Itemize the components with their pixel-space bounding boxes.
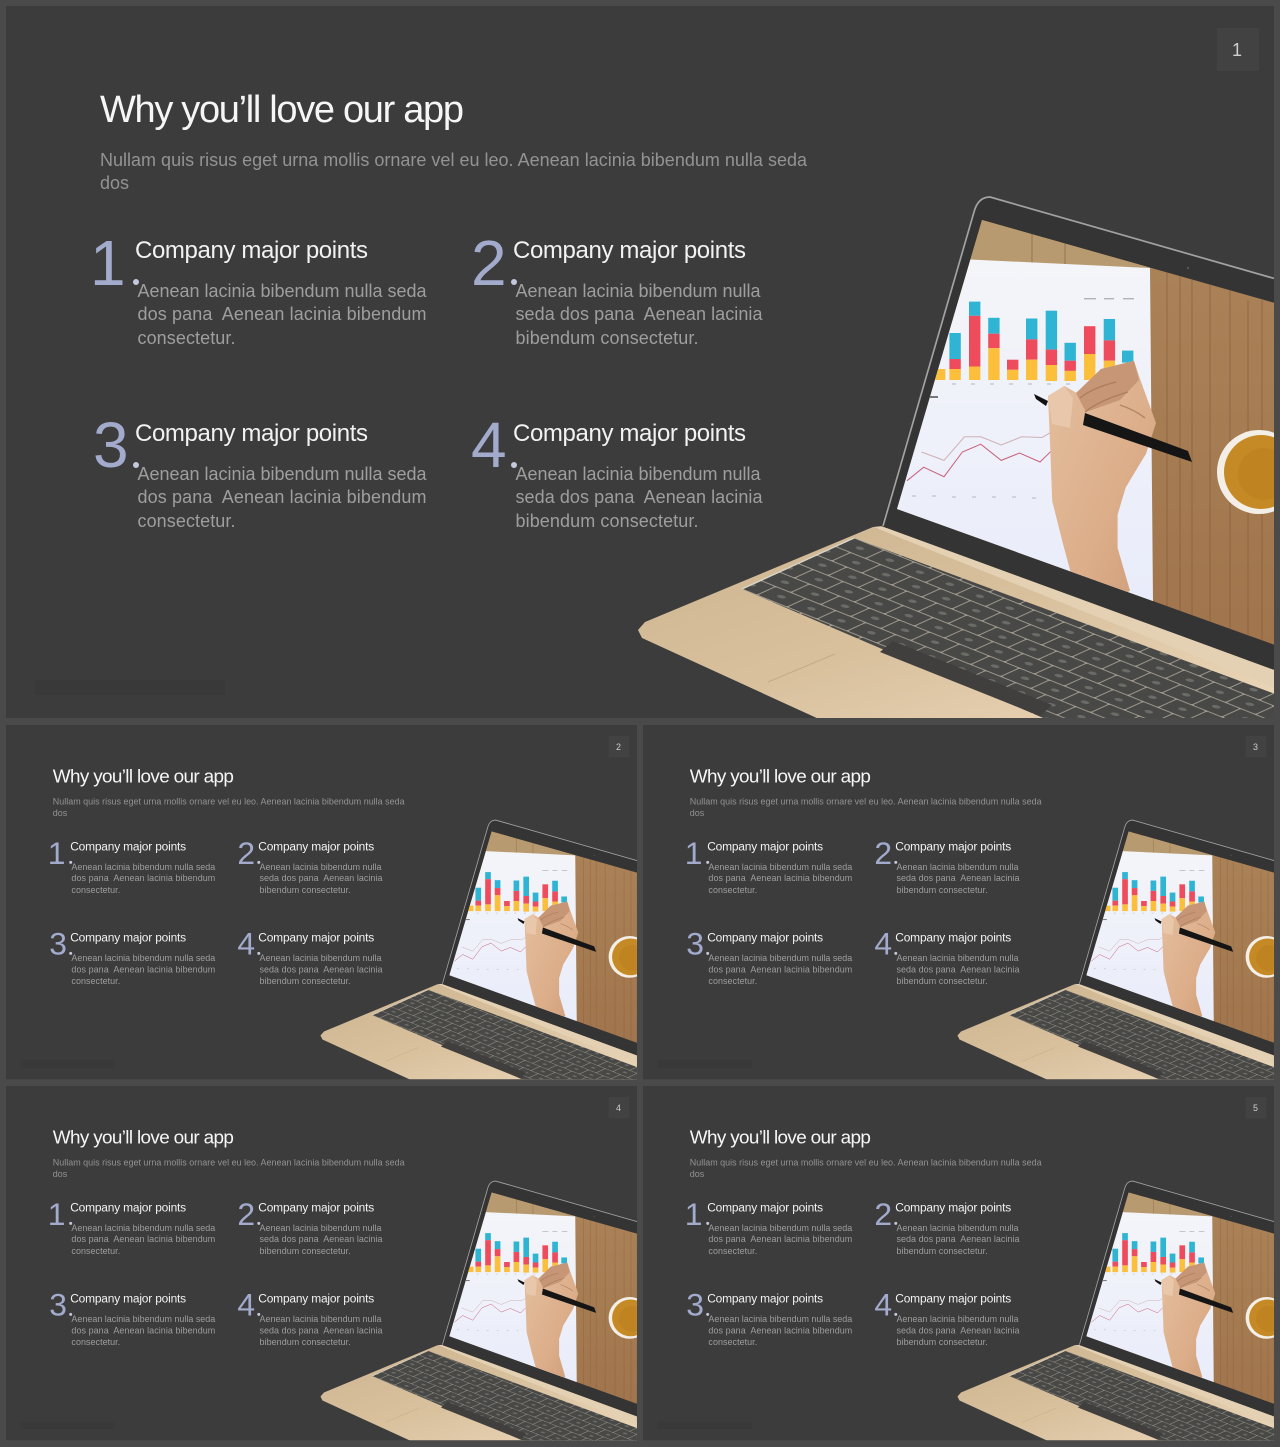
slide 5 point 3: Company major points — [707, 1291, 823, 1305]
slide 1 point 2: 2 — [471, 227, 507, 299]
slide 5 point 3: 3 — [686, 1286, 704, 1322]
slide 3 point 3: Aenean lacinia bibendum nulla seda — [708, 953, 852, 963]
slide 1 point 4: bibendum consectetur. — [516, 511, 698, 531]
slide 5 point 1: dos pana Aenean lacinia bibendum — [708, 1234, 852, 1244]
slide 3 point 4: bibendum consectetur. — [897, 976, 988, 986]
slide 1: large — [6, 6, 1280, 730]
slide 1 faint footer mark — [35, 680, 225, 695]
slide 2 intro text: Nullam quis risus eget urna mollis ornare vel eu leo. Aenean lacinia bibendum nulla seda — [53, 797, 405, 807]
slide 5 point 4: Aenean lacinia bibendum nulla — [897, 1314, 1018, 1324]
slide 2 point 3: Company major points — [70, 930, 186, 944]
slide 5 point 1: Aenean lacinia bibendum nulla seda — [708, 1223, 852, 1233]
slide 2 page number — [609, 736, 629, 757]
slide 1 point 2 — [471, 227, 763, 348]
slide 5 point 4: seda dos pana Aenean lacinia — [897, 1325, 1019, 1335]
slide 1 point 3: Company major points — [135, 420, 368, 447]
slide 4 intro text: Nullam quis risus eget urna mollis ornare vel eu leo. Aenean lacinia bibendum nulla seda — [53, 1158, 405, 1168]
slide 5 faint footer mark — [657, 1421, 752, 1429]
slide 2 point 3: 3 — [49, 925, 67, 961]
slide 3 page number — [1246, 736, 1266, 757]
slide 4 point 4: seda dos pana Aenean lacinia — [260, 1325, 382, 1335]
slide 2 point 1: 1 — [48, 835, 66, 871]
slide 4 point 1: consectetur. — [71, 1246, 120, 1256]
slide 4 point 4: Aenean lacinia bibendum nulla — [260, 1314, 381, 1324]
slide 2 point 1: dos pana Aenean lacinia bibendum — [71, 873, 215, 883]
slide 1 title: Why you’ll love our app — [100, 89, 464, 131]
slide 4 point 2: seda dos pana Aenean lacinia — [260, 1234, 382, 1244]
slide 3 point 3: 3 — [686, 925, 704, 961]
slide 3 point 4: Aenean lacinia bibendum nulla — [897, 953, 1018, 963]
slide 1 point 1: dos pana Aenean lacinia bibendum — [138, 304, 426, 324]
slide 2 laptop with chart photo — [320, 820, 650, 1085]
slide 1 page number: 1 — [1232, 40, 1242, 60]
slide 2 point 2: bibendum consectetur. — [260, 885, 351, 895]
slide 3 point 3: dos pana Aenean lacinia bibendum — [708, 964, 852, 974]
slide 3 intro text — [690, 797, 1042, 818]
slide 4 title: Why you’ll love our app — [53, 1128, 234, 1149]
slide 3 point 2: Company major points — [895, 839, 1011, 853]
slide 3 point 1: 1 — [685, 835, 703, 871]
slide 5 point 3 — [686, 1286, 852, 1347]
slide 3 title: Why you’ll love our app — [690, 767, 871, 788]
slide 1 point 1: consectetur. — [138, 328, 236, 348]
slide 4 point 3: Aenean lacinia bibendum nulla seda — [71, 1314, 215, 1324]
slide 3 intro text: Nullam quis risus eget urna mollis ornare vel eu leo. Aenean lacinia bibendum nulla seda — [690, 797, 1042, 807]
slide 4 point 3: consectetur. — [71, 1337, 120, 1347]
slide 4 point 1: 1 — [48, 1196, 66, 1232]
slide 1 point 1: 1 — [90, 227, 126, 299]
slide 4 point 1: dos pana Aenean lacinia bibendum — [71, 1234, 215, 1244]
slide 5 point 4: 4 — [874, 1286, 892, 1322]
slide 1 point 1 — [90, 227, 427, 348]
slide 4 point 3: 3 — [49, 1286, 67, 1322]
slide 5 point 4: Company major points — [895, 1291, 1011, 1305]
slide 4 laptop with chart photo — [320, 1181, 650, 1446]
slide 5 intro text: dos — [690, 1169, 705, 1179]
slide 5 point 2: Company major points — [895, 1200, 1011, 1214]
slide 4 point 3: dos pana Aenean lacinia bibendum — [71, 1325, 215, 1335]
slide 1 intro text: Nullam quis risus eget urna mollis ornare vel eu leo. Aenean lacinia bibendum nulla seda — [100, 150, 808, 170]
slide 2 point 1: Company major points — [70, 839, 186, 853]
slide 3 point 1: Company major points — [707, 839, 823, 853]
slide 4 faint footer mark — [20, 1421, 115, 1429]
slide 3 point 4: seda dos pana Aenean lacinia — [897, 964, 1019, 974]
slide 1 point 3: consectetur. — [138, 511, 236, 531]
slide 1 point 3: Aenean lacinia bibendum nulla seda — [138, 464, 427, 484]
slide 3 laptop with chart photo — [957, 820, 1280, 1085]
slide 1 point 3 — [93, 409, 427, 531]
slide 4 point 2: bibendum consectetur. — [260, 1246, 351, 1256]
slide 4 point 1: Company major points — [70, 1200, 186, 1214]
slide 2 point 4: Aenean lacinia bibendum nulla — [260, 953, 381, 963]
slide 3 point 3: Company major points — [707, 930, 823, 944]
slide 5 point 1 — [685, 1196, 852, 1256]
slide 3 panel — [643, 725, 1274, 1079]
slide 5 page number — [1246, 1097, 1266, 1118]
slide 1 point 4 — [471, 409, 763, 531]
slide 5 intro text: Nullam quis risus eget urna mollis ornare vel eu leo. Aenean lacinia bibendum nulla seda — [690, 1158, 1042, 1168]
slide 5 point 2: seda dos pana Aenean lacinia — [897, 1234, 1019, 1244]
slide 5 intro text — [690, 1158, 1042, 1179]
slide 2 title: Why you’ll love our app — [53, 767, 234, 788]
slide 1 point 1: Company major points — [135, 237, 368, 264]
slide 2 point 3 — [49, 925, 215, 986]
slide 1 point 4: Company major points — [513, 420, 746, 447]
slide 4 point 2: 2 — [237, 1196, 255, 1232]
slide 2 point 2: Company major points — [258, 839, 374, 853]
slide 1 point 2: bibendum consectetur. — [516, 328, 698, 348]
slide 1 laptop with chart photo — [638, 196, 1280, 730]
slide 3 point 2: bibendum consectetur. — [897, 885, 988, 895]
slide 2 panel — [6, 725, 637, 1079]
slide 3 page number: 3 — [1253, 742, 1258, 752]
slide 3 point 3 — [686, 925, 852, 986]
slide 5 point 3: Aenean lacinia bibendum nulla seda — [708, 1314, 852, 1324]
slide 1 page number — [1217, 28, 1259, 71]
slide 1 point 4: Aenean lacinia bibendum nulla — [516, 464, 761, 484]
slide 5 point 4: bibendum consectetur. — [897, 1337, 988, 1347]
slide 2 point 4: Company major points — [258, 930, 374, 944]
slide 2 point 3: dos pana Aenean lacinia bibendum — [71, 964, 215, 974]
slide 4 point 1 — [48, 1196, 215, 1256]
slide 2 point 4: bibendum consectetur. — [260, 976, 351, 986]
slide 5 point 2: bibendum consectetur. — [897, 1246, 988, 1256]
slide 5 title: Why you’ll love our app — [690, 1128, 871, 1149]
slide 4 page number: 4 — [616, 1103, 621, 1113]
slide 2 point 1 — [48, 835, 215, 895]
slide 4 — [6, 1086, 650, 1446]
slide 4 page number — [609, 1097, 629, 1118]
slide 3 point 2: seda dos pana Aenean lacinia — [897, 873, 1019, 883]
slide 1 intro text — [100, 150, 808, 193]
slide 1 intro text: dos — [100, 173, 129, 193]
slide 1 point 3: 3 — [93, 409, 129, 481]
slide 5 point 2: Aenean lacinia bibendum nulla — [897, 1223, 1018, 1233]
slide 3 — [643, 725, 1280, 1085]
slide 3 point 1: Aenean lacinia bibendum nulla seda — [708, 862, 852, 872]
slide 5 laptop with chart photo — [957, 1181, 1280, 1446]
slide 4 point 2 — [237, 1196, 382, 1256]
slide 2 point 1: consectetur. — [71, 885, 120, 895]
slide 4 point 3 — [49, 1286, 215, 1347]
slide 4 intro text — [53, 1158, 405, 1179]
slide 2 intro text: dos — [53, 808, 68, 818]
slide 2 point 3: Aenean lacinia bibendum nulla seda — [71, 953, 215, 963]
slide 5 point 3: dos pana Aenean lacinia bibendum — [708, 1325, 852, 1335]
slide 2 point 2: Aenean lacinia bibendum nulla — [260, 862, 381, 872]
slide 3 point 1 — [685, 835, 852, 895]
slide 5 point 2: 2 — [874, 1196, 892, 1232]
slide 3 faint footer mark — [657, 1060, 752, 1068]
slide 5 point 1: Company major points — [707, 1200, 823, 1214]
slide 4 intro text: dos — [53, 1169, 68, 1179]
slide 3 point 4 — [874, 925, 1019, 986]
slide 3 point 4: 4 — [874, 925, 892, 961]
slide 4 point 2: Aenean lacinia bibendum nulla — [260, 1223, 381, 1233]
slide 1 panel — [6, 6, 1274, 718]
slide 5 — [643, 1086, 1280, 1446]
slide 2 point 2 — [237, 835, 382, 895]
slide 2 point 4 — [237, 925, 382, 986]
slide 3 point 2: Aenean lacinia bibendum nulla — [897, 862, 1018, 872]
slide 2 point 4: 4 — [237, 925, 255, 961]
slide 2 faint footer mark — [20, 1060, 115, 1068]
slide 1 point 3: dos pana Aenean lacinia bibendum — [138, 487, 426, 507]
slide 3 point 1: consectetur. — [708, 885, 757, 895]
slide 2 intro text — [53, 797, 405, 818]
slide 1 point 1: Aenean lacinia bibendum nulla seda — [138, 281, 427, 301]
slide 5 point 2 — [874, 1196, 1019, 1256]
slide 3 intro text: dos — [690, 808, 705, 818]
slide 5 point 1: consectetur. — [708, 1246, 757, 1256]
slide 3 point 3: consectetur. — [708, 976, 757, 986]
slide 3 point 2 — [874, 835, 1019, 895]
slide 4 point 4: bibendum consectetur. — [260, 1337, 351, 1347]
slide 1 point 4: 4 — [471, 409, 507, 481]
slide 5 point 1: 1 — [685, 1196, 703, 1232]
slide 5 point 3: consectetur. — [708, 1337, 757, 1347]
slide 4 point 4: 4 — [237, 1286, 255, 1322]
slide 2 page number: 2 — [616, 742, 621, 752]
slide 1 point 2: Company major points — [513, 237, 746, 264]
slide 2 point 4: seda dos pana Aenean lacinia — [260, 964, 382, 974]
slide 2 point 3: consectetur. — [71, 976, 120, 986]
slide 5 panel — [643, 1086, 1274, 1440]
slide 2 point 1: Aenean lacinia bibendum nulla seda — [71, 862, 215, 872]
slide 2 point 2: 2 — [237, 835, 255, 871]
slide 1 point 4: seda dos pana Aenean lacinia — [516, 487, 763, 507]
slide 1 point 2: seda dos pana Aenean lacinia — [516, 304, 763, 324]
slide 5 point 4 — [874, 1286, 1019, 1347]
slide 5 page number: 5 — [1253, 1103, 1258, 1113]
slide 4 point 4 — [237, 1286, 382, 1347]
slide 4 point 4: Company major points — [258, 1291, 374, 1305]
slide 3 point 4: Company major points — [895, 930, 1011, 944]
slide 4 point 3: Company major points — [70, 1291, 186, 1305]
slide 3 point 1: dos pana Aenean lacinia bibendum — [708, 873, 852, 883]
slide 4 point 1: Aenean lacinia bibendum nulla seda — [71, 1223, 215, 1233]
slide 4 point 2: Company major points — [258, 1200, 374, 1214]
slide 1 point 2: Aenean lacinia bibendum nulla — [516, 281, 761, 301]
slide 2 point 2: seda dos pana Aenean lacinia — [260, 873, 382, 883]
slide 3 point 2: 2 — [874, 835, 892, 871]
slide 2 — [6, 725, 650, 1085]
slide 4 panel — [6, 1086, 637, 1440]
